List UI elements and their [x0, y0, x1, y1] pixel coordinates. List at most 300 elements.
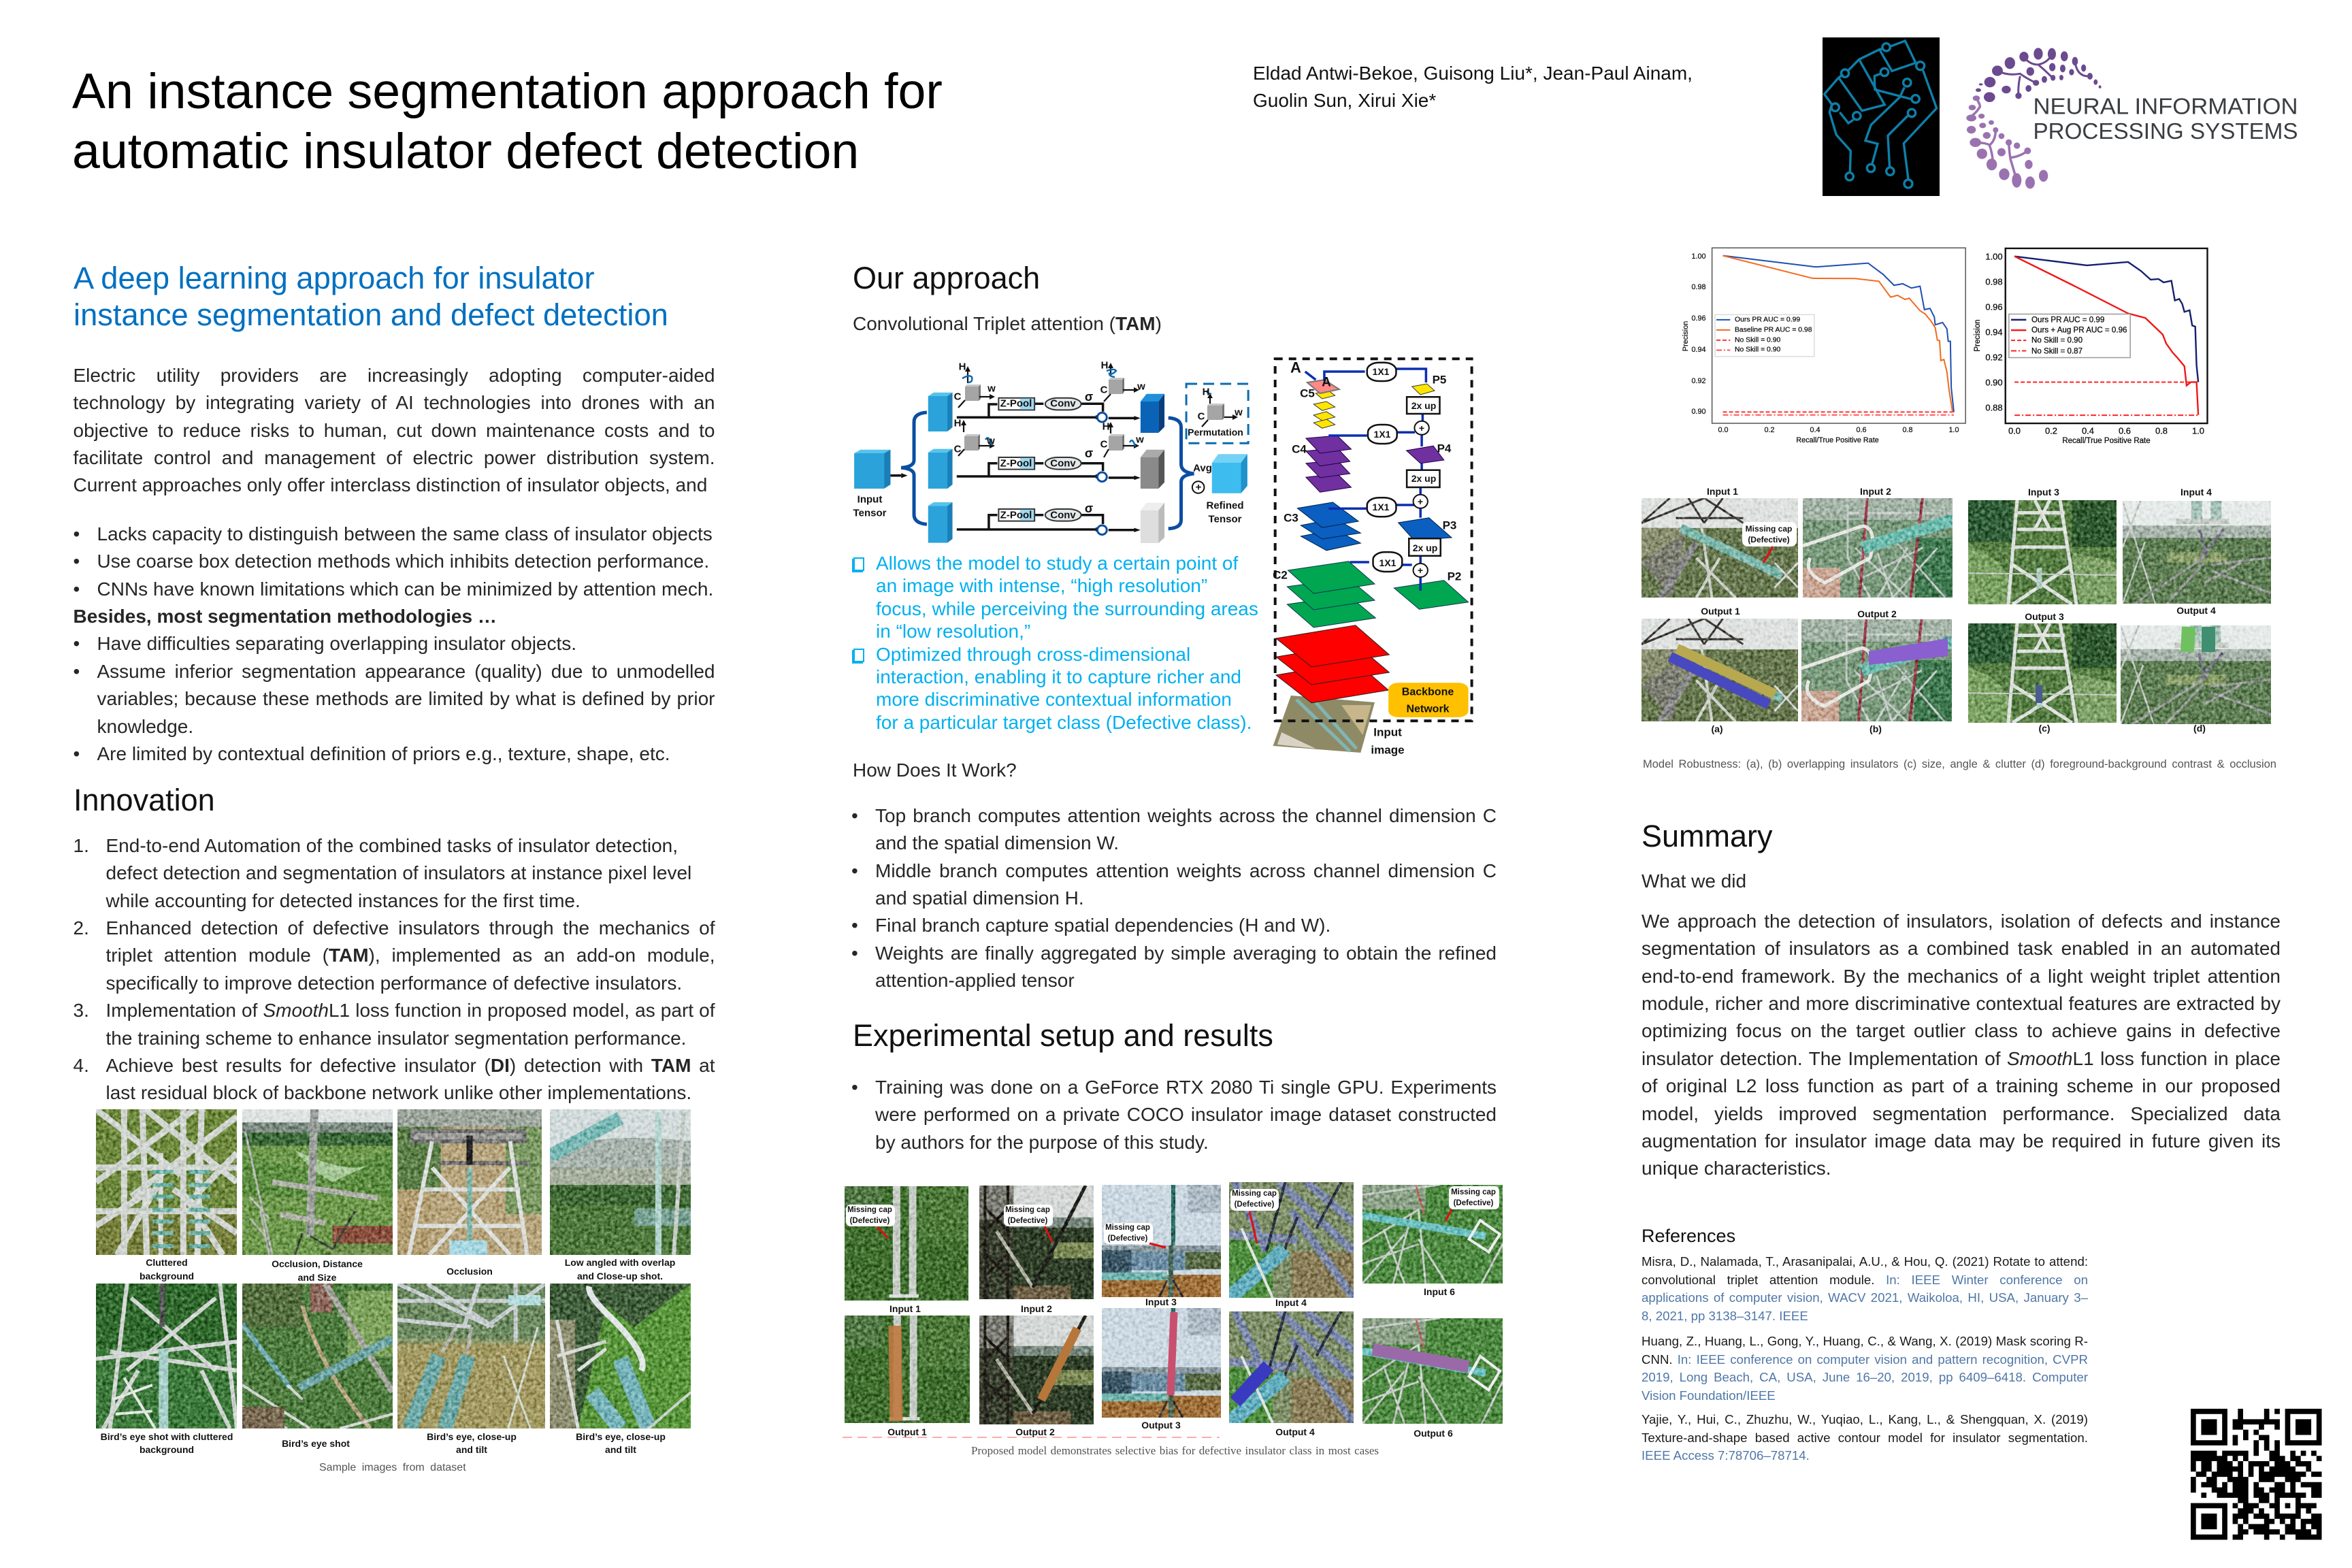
- diagram labels: +: [1196, 482, 1202, 493]
- diagram labels: C: [1100, 384, 1108, 396]
- text block: attention benefits: [852, 553, 1258, 733]
- robustness labels: Input 3: [2028, 487, 2059, 497]
- diagram labels: w: [1234, 407, 1243, 418]
- reference 3: Texture-and-shape based active contour model for insulator segmentation.: [1642, 1431, 2088, 1445]
- diagram labels: H: [959, 361, 966, 373]
- dashed border: [1275, 359, 1472, 721]
- text block: introduction: facilitate control and management of electric power distribution system.: [74, 447, 715, 468]
- photo: output 2: [979, 1316, 1094, 1424]
- sample image captions: Bird’s eye shot with cluttered: [101, 1431, 233, 1442]
- text block: summary: end-to-end framework. By the mechanics of a light weight triplet attention: [1642, 966, 2281, 987]
- heading: our approach: Our approach: [853, 261, 1040, 295]
- diagram labels: Tensor: [853, 508, 887, 519]
- branch lines: [890, 404, 1137, 530]
- list: innovations: defect detection and segmentation of insulators at instance pixel level: [106, 862, 691, 883]
- text block: summary: unique characteristics.: [1642, 1158, 1831, 1179]
- photo: output 6: [1362, 1318, 1503, 1424]
- list: innovations: specifically to improve detection performance of defective insulators.: [106, 973, 682, 994]
- pyramid labels: P5: [1433, 373, 1446, 387]
- callouts: missing cap: (Defective): [1008, 1217, 1048, 1225]
- text block: introduction: technology by integrating variety of AI technologies into drones with an: [74, 392, 715, 413]
- caption: sample images: Sample images from dataset: [319, 1462, 466, 1473]
- list: limitations: knowledge.: [97, 716, 193, 737]
- diagram labels: C: [1100, 438, 1108, 451]
- sample image captions: Low angled with overlap: [565, 1257, 675, 1268]
- chart 2 labels: 0.94: [1985, 327, 2003, 338]
- diagram labels: C: [1198, 411, 1205, 422]
- text block: attention benefits: in “low resolution,”: [876, 621, 1030, 642]
- callouts: missing cap: (Defective): [1235, 1200, 1275, 1209]
- list: innovations: 2.: [74, 917, 89, 938]
- list: experiments: [852, 1077, 1497, 1153]
- diagram labels: σ: [1085, 390, 1093, 404]
- diagram labels: w: [1135, 434, 1144, 445]
- sample image captions: background: [140, 1271, 194, 1281]
- robustness labels: Output 1: [1701, 606, 1740, 617]
- robustness labels: Input 1: [1707, 486, 1738, 497]
- result labels: [887, 1286, 1455, 1439]
- photo: output 2: [1801, 619, 1952, 721]
- subheading: triplet attention: Convolutional Triplet attention (TAM): [853, 313, 1162, 334]
- PR chart: ours vs baseline: [1682, 248, 1965, 444]
- model robustness images: [1642, 486, 2271, 734]
- reference 2: Vision Foundation/IEEE: [1642, 1388, 1776, 1403]
- braces: [901, 412, 1194, 529]
- list: limitations: CNNs have known limitations which can be minimized by attention mech.: [97, 578, 713, 600]
- logo wordmark: [2034, 94, 2298, 144]
- result labels: Output 1: [887, 1426, 927, 1437]
- text block: introduction: Electric utility providers are increasingly adopting computer-aided: [74, 365, 715, 386]
- text block: summary: We approach the detection of insulators, isolation of defects and instance: [1642, 911, 2281, 932]
- heading: experimental setup: Experimental setup and results: [853, 1018, 1273, 1053]
- boxes 2x up: [1407, 397, 1441, 556]
- chart 1 labels: 0.4: [1810, 426, 1820, 434]
- diagram labels: Input: [858, 494, 882, 505]
- chart 2 labels: Ours + Aug PR AUC = 0.96: [2031, 325, 2127, 335]
- cube: refined tensor: [1212, 454, 1247, 493]
- photo: input 3: [1102, 1185, 1221, 1297]
- text block: summary: of original L2 loss function as part of a training scheme in our proposed: [1642, 1075, 2281, 1096]
- list: how it works: and the spatial dimension W.: [875, 832, 1119, 853]
- pyramid labels: Backbone: [1402, 686, 1454, 698]
- list: innovations: [74, 835, 715, 1103]
- text block: attention benefits: more discriminative contextual information: [876, 689, 1232, 710]
- heading: a deep learning approach: [74, 261, 668, 332]
- yellow layers: [1313, 384, 1435, 428]
- text block: summary: insulator detection. The Implementation of SmoothL1 loss function in place: [1642, 1048, 2281, 1069]
- chart 2 labels: 0.96: [1985, 302, 2003, 312]
- chart 1 labels: Recall/True Positive Rate: [1796, 436, 1879, 444]
- subheading: how does it work: How Does It Work?: [853, 760, 1017, 781]
- cubes: branch tensors: [928, 393, 953, 543]
- photo: input 6: [1362, 1185, 1503, 1284]
- list: how it works: and spatial dimension H.: [875, 887, 1084, 909]
- list: innovations: Implementation of SmoothL1 loss function in proposed model, as part of: [106, 1000, 715, 1021]
- diagram labels: H: [1203, 387, 1209, 397]
- reference 2: 2019, Long Beach, CA, USA, June 16–20, 2019, pp 6409–6418. Computer: [1642, 1370, 2088, 1384]
- chart 2 labels: 0.88: [1985, 403, 2003, 412]
- chart 2 labels: Ours PR AUC = 0.99: [2031, 316, 2104, 324]
- title: An instance segmentation approach for: [72, 63, 943, 119]
- heading: a deep learning approach: instance segmentation and defect detection: [74, 297, 668, 332]
- reference 2: CNN. In: IEEE conference on computer vision and pattern recognition, CVPR: [1642, 1352, 2088, 1367]
- list: innovations: 1.: [74, 835, 89, 856]
- list: innovations: triplet attention module (TAM), implemented as an add-on module,: [106, 945, 715, 966]
- text block: introduction: Current approaches only offer interclass distinction of insulator objects, and: [74, 474, 707, 495]
- callouts: missing cap: (Defective): [1108, 1235, 1148, 1243]
- robustness labels: (b): [1869, 723, 1882, 734]
- photo: low angled with overlap: [550, 1109, 691, 1255]
- result labels: Input 4: [1275, 1297, 1307, 1308]
- robustness labels: [1701, 486, 2216, 734]
- chart 1 labels: 1.0: [1948, 426, 1959, 434]
- diagram labels: Conv: [1050, 397, 1076, 410]
- sample image captions: [101, 1257, 675, 1455]
- chart 2 labels: 0.4: [2082, 426, 2094, 436]
- text block: summary: model, yields improved segmentation performance. Specialized data: [1642, 1103, 2281, 1124]
- photo: birds eye shot: [242, 1284, 393, 1428]
- chart 1 labels: [1682, 252, 1959, 444]
- sample image captions: Bird’s eye, close-up: [576, 1431, 666, 1442]
- chart 1 labels: Baseline PR AUC = 0.98: [1735, 327, 1812, 333]
- pyramid labels: Network: [1406, 704, 1450, 715]
- arrowheads: [901, 415, 1141, 532]
- text block: attention benefits: focus, while perceiving the surrounding areas: [876, 598, 1258, 619]
- chart 1 labels: 0.2: [1764, 426, 1775, 434]
- list: how it works: Weights are finally aggregated by simple averaging to obtain the refined: [875, 943, 1497, 964]
- robustness labels: Input 2: [1860, 486, 1891, 497]
- photo: occlusion: [397, 1109, 542, 1255]
- pyramid labels: +: [1419, 423, 1424, 434]
- callout: missing cap: [1742, 522, 1797, 563]
- diagram labels: Refined: [1206, 500, 1244, 512]
- sum circle: [1192, 481, 1204, 493]
- photo: output 1: [845, 1316, 970, 1423]
- chart 2 labels: 0.2: [2045, 426, 2057, 436]
- list: limitations: Have difficulties separating overlapping insulator objects.: [97, 633, 576, 654]
- callouts: missing cap: Missing cap: [847, 1206, 892, 1214]
- list: innovations: 4.: [74, 1055, 89, 1076]
- title: [72, 63, 943, 179]
- chart 1 labels: 0.6: [1856, 426, 1867, 434]
- chart 2 labels: 0.98: [1985, 276, 2003, 287]
- diagram labels: H: [954, 418, 961, 429]
- C2 backbone red layers: [1276, 625, 1389, 703]
- chart 2 plot: [2006, 248, 2207, 423]
- heading: a deep learning approach: A deep learning approach for insulator: [74, 261, 595, 295]
- list: limitations: Use coarse box detection methods which inhibits detection performance.: [97, 551, 709, 572]
- list: innovations: Achieve best results for defective insulator (DI) detection with TAM at: [106, 1055, 715, 1076]
- reference 1: applications of computer vision, WACV 2021, Waikoloa, HI, USA, January 3–: [1642, 1290, 2088, 1305]
- result labels: Output 6: [1414, 1428, 1453, 1439]
- pyramid labels: A: [1322, 376, 1331, 389]
- multiply circles: [1097, 412, 1107, 535]
- robustness labels: Input 4: [2180, 487, 2212, 497]
- result labels: Input 6: [1424, 1286, 1455, 1297]
- callouts: missing cap: Missing cap: [1105, 1224, 1150, 1232]
- pyramid labels: +: [1418, 496, 1423, 507]
- chart 1 labels: 0.92: [1691, 377, 1706, 385]
- chart 1 labels: 0.98: [1691, 283, 1706, 291]
- list: innovations: the training scheme to enhance insulator segmentation performance.: [106, 1028, 686, 1049]
- icon: circuit fist logo: [1823, 37, 1940, 196]
- pyramid labels: Input: [1373, 725, 1402, 739]
- list: how it works: [852, 805, 1497, 991]
- diagram labels: w: [986, 436, 995, 446]
- cube: input tensor: [854, 450, 890, 489]
- text block: introduction: objective to reduce risks to human, cut down maintenance costs and to: [74, 420, 715, 441]
- list: innovations: last residual block of backbone network unlike other implementations.: [106, 1082, 691, 1103]
- reference 3: IEEE Access 7:78706–78714.: [1642, 1448, 1810, 1463]
- chart 1 labels: Ours PR AUC = 0.99: [1735, 316, 1800, 324]
- diagram labels: Tensor: [1209, 513, 1242, 525]
- diagram labels: H: [1102, 421, 1109, 433]
- callouts: missing cap: Missing cap: [1005, 1206, 1050, 1214]
- sample image captions: and tilt: [456, 1444, 487, 1455]
- callout: missing cap: (Defective): [1748, 535, 1790, 544]
- feature pyramid network diagram: [1273, 359, 1472, 757]
- heading: summary: Summary: [1642, 819, 1773, 853]
- callouts: missing cap: [846, 1186, 1499, 1247]
- diagram labels: w: [987, 382, 996, 395]
- authors: [1253, 63, 1693, 111]
- photo: birds eye with clutter: [96, 1284, 237, 1428]
- chart 1 labels: 1.00: [1691, 252, 1706, 261]
- list: innovations: Enhanced detection of defective insulators through the mechanics of: [106, 917, 715, 938]
- subheading: what we did: What we did: [1642, 870, 1746, 892]
- logo wordmark: NEURAL INFORMATION: [2034, 94, 2298, 120]
- robustness labels: Output 4: [2176, 605, 2216, 616]
- diagram labels: σ: [1085, 446, 1093, 460]
- input image: [1273, 696, 1375, 753]
- diagram labels: Permutation: [1188, 427, 1243, 438]
- chart 2 labels: No Skill = 0.87: [2031, 347, 2082, 355]
- text block: summary: segmentation of insulators as a combined task enabled in an automated: [1642, 938, 2281, 959]
- chart 2 labels: [1974, 252, 2204, 445]
- chart 2 labels: 1.0: [2192, 426, 2204, 436]
- sample image captions: Occlusion: [446, 1266, 493, 1277]
- text block: introduction: [74, 365, 715, 495]
- text block: attention benefits: for a particular target class (Defective class).: [876, 712, 1252, 733]
- model results images: [843, 1182, 1503, 1439]
- reference 1: 8, 2021, pp 3138–3147. IEEE: [1642, 1309, 1808, 1323]
- result labels: Output 4: [1275, 1426, 1315, 1437]
- photo: output 4: [2121, 625, 2271, 724]
- result labels: Input 3: [1145, 1296, 1177, 1307]
- diagram labels: Avg: [1193, 463, 1212, 474]
- pyramid labels: C3: [1284, 512, 1298, 524]
- list: how it works: Middle branch computes attention weights across channel dimension C: [875, 860, 1497, 881]
- list: how it works: attention-applied tensor: [875, 970, 1075, 991]
- title: automatic insulator defect detection: [72, 122, 859, 179]
- diagram labels: Z-Pool: [1000, 509, 1032, 521]
- pyramid labels: C4: [1292, 442, 1307, 456]
- chart 1 labels: No Skill = 0.90: [1735, 346, 1781, 354]
- sample image captions: Bird’s eye shot: [282, 1438, 350, 1449]
- blue connectors: [1305, 369, 1426, 591]
- diagram labels: [853, 359, 1244, 525]
- photo: output 3: [1102, 1308, 1221, 1418]
- callouts: missing cap: (Defective): [850, 1217, 890, 1225]
- z-pool boxes: [998, 398, 1034, 521]
- list: limitations: variables; because these methods are limited by what is defined by prior: [97, 688, 715, 709]
- callouts: missing cap: Missing cap: [1232, 1190, 1277, 1198]
- sample image captions: Bird’s eye, close-up: [427, 1431, 517, 1442]
- pyramid labels: 2x up: [1413, 542, 1437, 553]
- diagram labels: Conv: [1050, 457, 1076, 470]
- photo: input 2: [1803, 498, 1953, 598]
- robustness labels: (c): [2038, 723, 2051, 734]
- chart 2 labels: Precision: [1974, 319, 1982, 352]
- photo: output 1: [1642, 619, 1798, 721]
- photo: input 1: [1642, 498, 1798, 598]
- photo: input 4: [1229, 1182, 1354, 1298]
- sample image captions: and tilt: [605, 1444, 636, 1455]
- list: limitations: Assume inferior segmentation appearance (quality) due to unmodelled: [97, 661, 715, 682]
- diagram labels: Z-Pool: [1000, 457, 1032, 470]
- callouts: missing cap: Missing cap: [1451, 1188, 1496, 1196]
- list: experiments: by authors for the purpose of this study.: [875, 1132, 1209, 1153]
- list: innovations: 3.: [74, 1000, 89, 1021]
- chart 1 labels: 0.94: [1691, 346, 1706, 354]
- reference 1: convolutional triplet attention module. In: IEEE Winter conference on: [1642, 1273, 2088, 1287]
- sample dataset images: [96, 1109, 691, 1455]
- pyramid labels: 1X1: [1373, 502, 1390, 512]
- reference 1: Misra, D., Nalamada, T., Arasanipalai, A.U., & Hou, Q. (2021) Rotate to attend:: [1642, 1254, 2088, 1269]
- robustness labels: (a): [1711, 723, 1723, 734]
- text block: summary: [1642, 911, 2281, 1179]
- pyramid labels: P2: [1448, 570, 1461, 583]
- list: experiments: Training was done on a GeForce RTX 2080 Ti single GPU. Experiments: [875, 1077, 1497, 1098]
- chart 2 labels: Recall/True Positive Rate: [2062, 437, 2151, 445]
- photo: output 3: [1968, 623, 2117, 723]
- diagram labels: Z-Pool: [1000, 397, 1032, 410]
- result labels: Output 2: [1015, 1426, 1055, 1437]
- sample image captions: Occlusion, Distance: [272, 1258, 363, 1269]
- icon: NeurIPS logo: [1966, 48, 2298, 189]
- list: limitations: Besides, most segmentation methodologies …: [74, 606, 497, 627]
- chart 1 plot: [1712, 248, 1965, 423]
- list: limitations: Lacks capacity to distinguish between the same class of insulator objects: [97, 523, 713, 544]
- list: innovations: while accounting for detected instances for the first time.: [106, 890, 581, 911]
- chart 1 labels: 0.8: [1902, 426, 1913, 434]
- z-pool tint: [1020, 399, 1034, 521]
- callout: missing cap: Missing cap: [1746, 524, 1792, 534]
- cubes: output tensors: [1141, 394, 1164, 543]
- chart 2 labels: 1.00: [1985, 252, 2003, 261]
- pyramid labels: +: [1418, 565, 1423, 576]
- pyramid labels: C5: [1300, 387, 1315, 400]
- reference 3: [1642, 1412, 2088, 1463]
- photo: input 2: [979, 1186, 1094, 1299]
- text block: summary: augmentation for insulator image data may be required in future given its: [1642, 1130, 2281, 1152]
- robustness labels: Output 2: [1857, 608, 1897, 619]
- chart 2 labels: 0.6: [2119, 426, 2131, 436]
- pyramid shapes: [1273, 359, 1472, 753]
- list: how it works: Final branch capture spatial dependencies (H and W).: [875, 915, 1330, 936]
- pyramid labels: 2x up: [1411, 473, 1436, 484]
- diagram labels: C: [954, 391, 962, 403]
- chart 1 labels: 0.0: [1718, 426, 1729, 434]
- result labels: Output 3: [1141, 1420, 1181, 1431]
- chart 1 labels: Precision: [1682, 321, 1690, 351]
- text block: summary: optimizing focus on the target outlier class to achieve gains in defective: [1642, 1020, 2281, 1041]
- plus circles: [1414, 421, 1429, 577]
- text block: attention benefits: Allows the model to study a certain point of: [876, 553, 1238, 574]
- blue layers: [1297, 502, 1452, 551]
- photo: occlusion, distance and size: [242, 1109, 393, 1255]
- sample image captions: Cluttered: [146, 1257, 188, 1268]
- pyramid labels: A: [1290, 359, 1301, 376]
- list: how it works: Top branch computes attention weights across the channel dimension C: [875, 805, 1497, 826]
- caption: model robustness: Model Robustness: (a), (b) overlapping insulators (c) size, angle & clutter (d) foreground-background contrast & occlusion: [1643, 758, 2276, 770]
- reference 3: Yajie, Y., Hui, C., Zhuzhu, W., Yuqiao, L., Kang, L., & Shengquan, X. (2019): [1642, 1412, 2088, 1426]
- sample image captions: background: [140, 1444, 194, 1455]
- list: limitations: Are limited by contextual definition of priors e.g., texture, shape, etc.: [97, 743, 670, 764]
- photo: input 1: [845, 1186, 968, 1301]
- chart 2 labels: 0.8: [2155, 426, 2168, 436]
- attention patch: [1307, 380, 1339, 393]
- text block: summary: module, richer and more discriminative contextual features are extracted by: [1642, 993, 2281, 1014]
- backbone badge: [1388, 683, 1469, 717]
- heading: references: References: [1642, 1226, 1735, 1246]
- list: limitations: [74, 523, 715, 764]
- list: innovations: End-to-end Automation of the combined tasks of insulator detection,: [106, 835, 678, 856]
- green layers: [1287, 561, 1469, 627]
- result labels: Input 2: [1021, 1303, 1052, 1314]
- photo: birds eye close-up: [397, 1284, 545, 1431]
- gray rotation cubes: [958, 363, 1238, 457]
- pyramid labels: image: [1371, 743, 1405, 757]
- result labels: Input 1: [889, 1303, 921, 1314]
- authors: Guolin Sun, Xirui Xie*: [1253, 90, 1436, 111]
- photo: cluttered background: [96, 1109, 237, 1255]
- text block: attention benefits: an image with intense, “high resolution”: [876, 575, 1207, 596]
- reference 1: [1642, 1254, 2088, 1323]
- QR code: [2191, 1409, 2322, 1539]
- text block: attention benefits: Optimized through cross-dimensional: [876, 644, 1190, 665]
- boxes 1x1: [1367, 363, 1402, 572]
- pyramid labels: C2: [1273, 569, 1288, 581]
- PR chart: ours vs augmentation: [1974, 248, 2207, 445]
- diagram labels: C: [954, 444, 962, 455]
- diagram labels: Conv: [1050, 509, 1076, 521]
- sample image captions: and Size: [298, 1272, 337, 1283]
- chart 1 labels: No Skill = 0.90: [1735, 336, 1781, 344]
- diagram shapes: [854, 384, 1248, 543]
- permutation dashed box: [1186, 384, 1248, 443]
- chart 2 labels: No Skill = 0.90: [2031, 336, 2082, 344]
- pyramid labels: 1X1: [1373, 366, 1390, 377]
- diagram labels: H: [1101, 359, 1108, 372]
- pyramid labels: 1X1: [1374, 429, 1391, 440]
- sample image captions: and Close-up shot.: [577, 1271, 663, 1281]
- diagram labels: w: [1137, 381, 1145, 392]
- pyramid labels: 2x up: [1411, 400, 1436, 411]
- photo: output 4: [1229, 1311, 1354, 1423]
- authors: Eldad Antwi-Bekoe, Guisong Liu*, Jean-Paul Ainam,: [1253, 63, 1693, 84]
- chart 2 labels: 0.0: [2008, 426, 2021, 436]
- logo wordmark: PROCESSING SYSTEMS: [2034, 119, 2298, 144]
- chart 1 labels: 0.96: [1691, 314, 1706, 323]
- reference 2: Huang, Z., Huang, L., Gong, Y., Huang, C., & Wang, X. (2019) Mask scoring R-: [1642, 1334, 2088, 1348]
- diagram labels: σ: [1085, 502, 1093, 515]
- heading: innovation: Innovation: [74, 783, 215, 817]
- callouts: missing cap: (Defective): [1454, 1199, 1494, 1207]
- pyramid labels: P3: [1443, 519, 1456, 532]
- robustness labels: (d): [2193, 723, 2206, 734]
- chart 2 labels: 0.92: [1985, 353, 2003, 362]
